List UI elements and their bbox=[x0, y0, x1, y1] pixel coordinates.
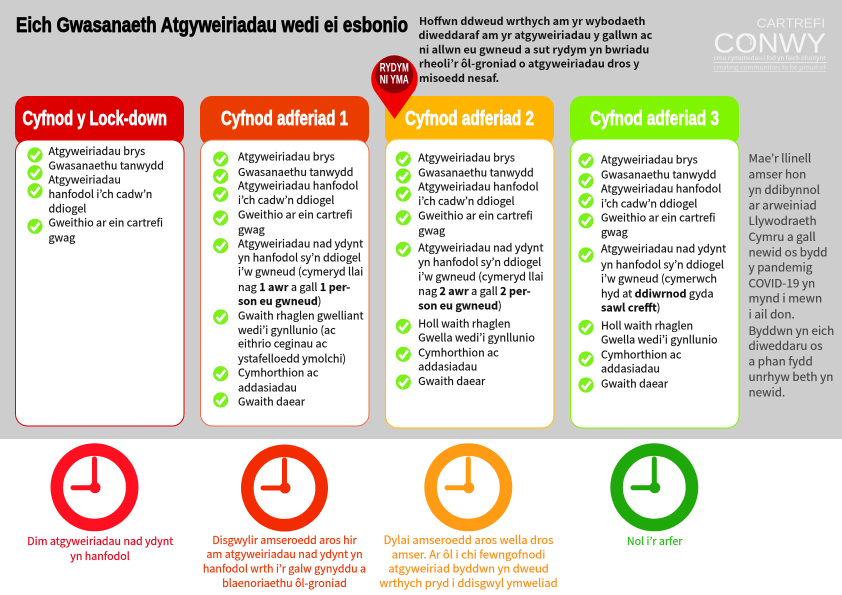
panel: lock-down: Atgyweiriadau brys bbox=[48, 143, 145, 159]
grey background band bbox=[0, 0, 842, 439]
caption: amber: wrthych pryd i ddisgwyl ymweliad bbox=[379, 575, 558, 591]
panel: recovery period 3: Atgyweiriadau nad ydynt bbox=[601, 241, 726, 257]
panel: recovery period 3: gwag bbox=[601, 224, 628, 240]
panel: recovery period 3: Holl waith rhaglen bbox=[601, 317, 693, 333]
caption: amber: atgyweiriad byddwn yn dweud bbox=[388, 561, 549, 577]
intro text block bbox=[418, 13, 653, 86]
map pin: we are here: NI YMA bbox=[380, 75, 409, 87]
side note: mynd i mewn bbox=[748, 290, 822, 307]
caption: amber bbox=[379, 532, 558, 591]
title: Eich Gwasanaeth Atgyweiriadau wedi ei esbonio bbox=[16, 13, 408, 37]
map pin: we are here: RYDYM bbox=[380, 63, 409, 75]
panel: recovery period 1: wedi’i gynllunio (ac bbox=[238, 322, 336, 338]
side note: Cymru a gall bbox=[748, 228, 816, 245]
panel: recovery period 3: Gweithio ar ein cartrefi bbox=[601, 210, 715, 226]
panel: recovery period 1: Atgyweiriadau nad ydynt bbox=[238, 236, 363, 252]
side note: Byddwn yn eich bbox=[748, 322, 834, 339]
panel: recovery period 3: Atgyweiriadau hanfodol bbox=[601, 181, 721, 197]
panel: recovery period 1: nag 1 awr a gall 1 per- bbox=[238, 279, 350, 295]
caption: red: yn hanfodol bbox=[70, 549, 130, 564]
side note: diweddaru os bbox=[748, 337, 823, 354]
panel: recovery period 2: nag 2 awr a gall 2 per- bbox=[418, 283, 531, 299]
panel: recovery period 2: Atgyweiriadau brys bbox=[418, 150, 515, 166]
logo: Cartrefi Conwy: creu cymunedau i fod yn falch ohonynt bbox=[714, 54, 826, 62]
caption: red: Dim atgyweiriadau nad ydynt bbox=[27, 534, 173, 549]
logo: Cartrefi Conwy: creating communities to be proud of bbox=[714, 64, 826, 72]
clock: red bbox=[57, 450, 132, 525]
panel: lock-down bbox=[15, 96, 184, 426]
panel: recovery period 3: hyd at ddiwrnod gyda bbox=[601, 285, 714, 301]
caption: dark orange: am atgyweiriadau nad ydynt yn bbox=[206, 547, 363, 562]
panel: lock-down: Cyfnod y Lock-down bbox=[22, 108, 167, 130]
map pin: we are here bbox=[371, 55, 418, 119]
caption: green: Nol i’r arfer bbox=[627, 534, 683, 549]
clock: amber bbox=[431, 450, 506, 525]
intro text block: diweddaraf am yr atgyweiriadau y gallwn ac bbox=[418, 27, 653, 43]
panel: recovery period 1: Gweithio ar ein cartrefi bbox=[238, 206, 352, 222]
panel: recovery period 3 bbox=[570, 96, 739, 428]
panel: recovery period 1: Gwaith daear bbox=[238, 394, 306, 410]
caption: dark orange: blaenoriaethu ôl-groniad bbox=[222, 576, 347, 591]
side note: newid os bydd bbox=[748, 244, 828, 261]
side note: unrhyw beth yn bbox=[748, 368, 833, 385]
intro text block: misoedd nesaf. bbox=[419, 70, 499, 86]
panel: recovery period 3: Atgyweiriadau brys bbox=[601, 151, 698, 167]
panel: recovery period 1 bbox=[200, 96, 369, 426]
panel: lock-down: gwag bbox=[48, 230, 75, 246]
panel: recovery period 1: i’w gwneud (cymeryd llai bbox=[238, 264, 363, 280]
panel: recovery period 2: Gweithio ar ein cartrefi bbox=[418, 207, 533, 223]
clock: green bbox=[617, 450, 692, 525]
clock: dark orange bbox=[247, 451, 322, 525]
caption: amber: Dylai amseroedd aros wella dros bbox=[384, 532, 553, 548]
panel: recovery period 2: Cymhorthion ac bbox=[418, 345, 499, 361]
panel: recovery period 1: Cymhorthion ac bbox=[238, 365, 319, 381]
panel: recovery period 2: yn hanfodol sy’n ddiogel bbox=[418, 254, 541, 270]
caption: red bbox=[27, 534, 173, 564]
panel: recovery period 3: Gwaith daear bbox=[601, 375, 669, 391]
panel: recovery period 3: yn hanfodol sy’n ddiogel bbox=[601, 256, 724, 272]
logo: Cartrefi Conwy: CONWY bbox=[714, 27, 826, 58]
panel: recovery period 1: Cyfnod adferiad 1 bbox=[221, 108, 348, 130]
side note: y pandemig bbox=[748, 259, 813, 276]
panel: recovery period 3: addasiadau bbox=[601, 361, 660, 377]
panel: recovery period 3: Cyfnod adferiad 3 bbox=[590, 108, 719, 130]
panel: recovery period 2: Cyfnod adferiad 2 bbox=[405, 108, 534, 130]
side note: Mae’r llinell bbox=[748, 150, 811, 167]
caption: dark orange: Disgwylir amseroedd aros hir bbox=[212, 533, 358, 548]
panel: recovery period 3: i’ch cadw’n ddiogel bbox=[601, 195, 697, 211]
panel: recovery period 1: yn hanfodol sy’n ddiogel bbox=[238, 250, 361, 266]
side note: COVID-19 yn bbox=[748, 274, 815, 291]
panel: recovery period 1: Gwasanaethu tanwydd bbox=[238, 164, 353, 180]
intro text block: ni allwn eu gwneud a sut rydym yn bwriadu bbox=[419, 41, 649, 57]
panel: recovery period 1: Atgyweiriadau brys bbox=[238, 149, 335, 165]
intro text block: Hoffwn ddweud wrthych am yr wybodaeth bbox=[419, 13, 646, 29]
panel: lock-down: ddiogel bbox=[48, 200, 86, 216]
panel: recovery period 3: Gwella wedi’i gynllunio bbox=[601, 331, 718, 347]
side note: yn ddibynnol bbox=[748, 181, 820, 198]
caption: dark orange bbox=[203, 533, 366, 591]
panel: recovery period 1: eithrio ceginau ac bbox=[238, 336, 328, 352]
panel: recovery period 2: i’w gwneud (cymeryd llai bbox=[418, 269, 544, 285]
panel: recovery period 2: Atgyweiriadau hanfodol bbox=[418, 179, 539, 195]
side note bbox=[748, 150, 834, 401]
panel: recovery period 3: sawl crefft) bbox=[601, 300, 660, 316]
panel: recovery period 2: i’ch cadw’n ddiogel bbox=[418, 193, 515, 209]
panel: recovery period 2: son eu gwneud) bbox=[418, 297, 502, 313]
panel: recovery period 2: Gwella wedi’i gynllunio bbox=[418, 330, 535, 346]
panel: recovery period 1: i’ch cadw’n ddiogel bbox=[238, 192, 334, 208]
panel: recovery period 1: Atgyweiriadau hanfodol bbox=[238, 177, 358, 193]
panel: lock-down: Gwasanaethu tanwydd bbox=[48, 158, 164, 174]
panel: recovery period 3: i’w gwneud (cymerwch bbox=[601, 271, 717, 287]
side note: newid. bbox=[748, 384, 785, 401]
panel: recovery period 2: gwag bbox=[418, 222, 445, 238]
panel: recovery period 2: addasiadau bbox=[418, 359, 477, 375]
panel: recovery period 3: Cymhorthion ac bbox=[601, 346, 682, 362]
panel: recovery period 1: gwag bbox=[238, 221, 265, 237]
panel: recovery period 2: Holl waith rhaglen bbox=[418, 316, 510, 332]
panel: recovery period 2: Gwasanaethu tanwydd bbox=[418, 165, 534, 181]
side note: amser hon bbox=[748, 166, 806, 183]
side note: Llywodraeth bbox=[748, 212, 817, 229]
side note: i ail don. bbox=[748, 305, 795, 322]
panel: recovery period 3: Gwasanaethu tanwydd bbox=[601, 166, 716, 182]
side note: ar arweiniad bbox=[748, 196, 817, 213]
panel: recovery period 2: Atgyweiriadau nad ydynt bbox=[418, 240, 543, 256]
panel: lock-down: Gweithio ar ein cartrefi bbox=[48, 214, 163, 230]
panel: recovery period 1: son eu gwneud) bbox=[238, 293, 321, 309]
panel: lock-down: Atgyweiriadau bbox=[48, 172, 121, 188]
caption: amber: amser. Ar ôl i chi fewngofnodi bbox=[392, 547, 545, 563]
side note: a phan fydd bbox=[748, 353, 813, 370]
logo: Cartrefi Conwy bbox=[714, 16, 826, 72]
panel: lock-down: hanfodol i’ch cadw’n bbox=[48, 186, 152, 202]
panel: recovery period 2: Gwaith daear bbox=[418, 373, 486, 389]
intro text block: rheoli’r ôl-groniad o atgyweiriadau dros y bbox=[419, 56, 640, 72]
caption: dark orange: hanfodol wrth i’r galw gynyddu a bbox=[203, 562, 366, 577]
panel: recovery period 1: ystafelloedd ymolchi) bbox=[238, 351, 346, 367]
panel: recovery period 1: Gwaith rhaglen gwelliant bbox=[238, 307, 364, 323]
panel: recovery period 2 bbox=[385, 96, 554, 428]
panel: recovery period 1: addasiadau bbox=[238, 380, 297, 396]
logo: Cartrefi Conwy: CARTREFI bbox=[757, 16, 825, 30]
